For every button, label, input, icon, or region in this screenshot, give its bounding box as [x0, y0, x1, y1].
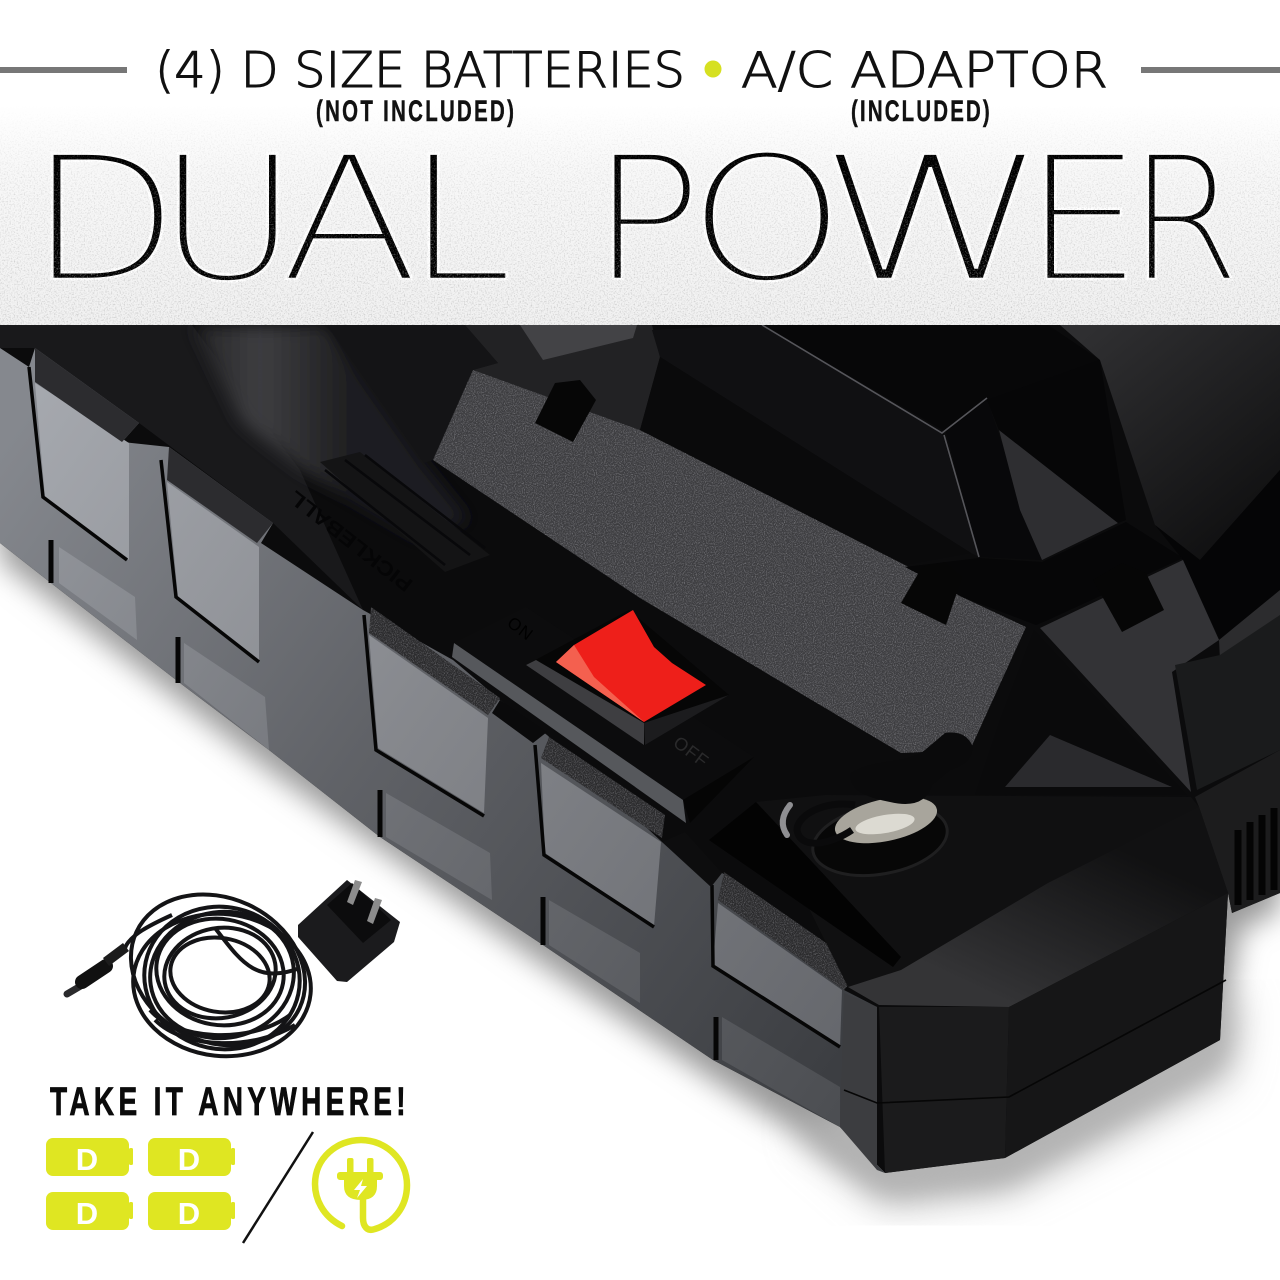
- top left dark plane: [0, 325, 363, 610]
- side wall: [0, 348, 885, 1173]
- adaptor plug face: [327, 883, 391, 943]
- tower top face: [762, 325, 1100, 432]
- corner front face right: [1005, 893, 1228, 1158]
- screw boss 3: [1093, 563, 1164, 632]
- off label: OFF: [670, 732, 713, 772]
- icon: d battery 1: [46, 1138, 133, 1177]
- rear lower black: [1155, 470, 1280, 645]
- title: dual power: [28, 119, 1240, 320]
- tower shiny facet: [999, 430, 1118, 560]
- icon: d battery 4: [148, 1192, 235, 1231]
- screw boss 2: [901, 562, 962, 625]
- tagline: TAKE IT ANYWHERE!: [50, 1080, 406, 1124]
- header: batteries: (4) D SIZE BATTERIES: [155, 42, 685, 99]
- metal nut: [831, 789, 941, 851]
- corner pillar: [840, 993, 877, 1170]
- nut highlight: [854, 810, 916, 838]
- title: dual power: L: [405, 120, 513, 320]
- side window 5: [713, 903, 842, 1047]
- right smooth wedge: [1040, 560, 1219, 792]
- title: dual power: P: [590, 120, 702, 320]
- title: dual power: R: [1128, 120, 1240, 320]
- right slot block: [1195, 750, 1280, 913]
- main black body: [0, 325, 1280, 1173]
- right header rule: [1141, 67, 1280, 73]
- title: dual power: D: [28, 120, 179, 320]
- title: dual power: U: [156, 121, 299, 320]
- icon: d battery 2: D: [178, 1142, 200, 1177]
- switch plate side: [452, 643, 686, 823]
- side window 4: [541, 763, 661, 926]
- corner seam: [844, 980, 1226, 1103]
- jack base ring: [807, 795, 953, 885]
- title: dual power: W: [817, 120, 1049, 320]
- slash divider: [243, 1132, 313, 1243]
- window shadow lines: [29, 367, 840, 1060]
- bezel right lip: [644, 695, 729, 745]
- red rocker highlight: [556, 645, 644, 722]
- tower edge highlight: [762, 325, 987, 557]
- icon: d battery 3: D: [76, 1196, 98, 1231]
- collar: [905, 566, 964, 598]
- power adaptor photo: [67, 867, 400, 1073]
- title: dual power: E: [1023, 119, 1143, 320]
- header: separator dot: [704, 60, 722, 78]
- tower left facet: [652, 330, 658, 351]
- textured strips: [369, 607, 862, 990]
- brand emboss: PICKLEBALL: [285, 486, 417, 595]
- pyramid reflection: [1005, 735, 1172, 787]
- film grain over title band: [0, 105, 1280, 325]
- top panel behind plate: [465, 325, 660, 430]
- adaptor body: [298, 880, 400, 982]
- side window 2: [167, 482, 259, 662]
- sub-label: included: (INCLUDED): [851, 95, 990, 128]
- corner front face left: [879, 1007, 1009, 1173]
- sub-label: not included: (NOT INCLUDED): [316, 95, 514, 128]
- title: dual power: O: [688, 120, 846, 320]
- side window 1: [35, 383, 129, 560]
- power switch: [452, 607, 754, 823]
- rubber loop: [797, 804, 855, 843]
- product photo: base unit: [0, 325, 1280, 1173]
- corner bevel: [848, 807, 1228, 1007]
- screw boss 1: [535, 380, 596, 442]
- strain relief: [106, 947, 126, 962]
- dark pyramid: [975, 630, 1187, 795]
- strip grit: [369, 607, 862, 990]
- brand emboss: [295, 452, 489, 572]
- plate end shadow: [683, 757, 754, 823]
- right upper strip: [1219, 590, 1280, 660]
- prong 1: [347, 880, 362, 905]
- icon: power plug: [315, 1140, 407, 1230]
- black wedge: [709, 802, 901, 967]
- side window 3: [369, 635, 488, 813]
- icon: d battery 2: [148, 1138, 235, 1177]
- prong 2: [367, 898, 382, 924]
- tower front facet: [946, 400, 1042, 560]
- product shadow: [0, 543, 1280, 1225]
- dc power jack: [783, 732, 972, 885]
- red rocker: [556, 610, 706, 722]
- barrel plug tip: [67, 984, 84, 994]
- rubber cap: [851, 732, 972, 804]
- chrome glint: [783, 805, 790, 835]
- corner top face: [756, 795, 1228, 1007]
- switch plate: [454, 607, 754, 800]
- wall caps: [35, 348, 722, 887]
- handle shape: [192, 325, 470, 540]
- deck grit: [433, 370, 1026, 753]
- tower right dark facet: [999, 430, 1118, 523]
- icon: d battery 4: D: [178, 1196, 200, 1231]
- title: dual power: A: [280, 120, 419, 320]
- switch bezel textured lip: [526, 660, 644, 745]
- top plate: [520, 325, 637, 360]
- left header rule: [0, 67, 127, 73]
- icon: d battery 1: D: [76, 1142, 98, 1177]
- tower base strip: [640, 430, 905, 565]
- coiled cable: [106, 867, 330, 1073]
- lower wall panels: [59, 547, 840, 1127]
- right block: [1175, 615, 1280, 790]
- rear housing: [1060, 325, 1280, 560]
- icon: d battery 3: [46, 1192, 133, 1231]
- header: adaptor: A/C ADAPTOR: [741, 42, 1108, 99]
- textured title band: [0, 105, 1280, 325]
- upper middle plane: [327, 325, 498, 463]
- plug body: [82, 966, 106, 982]
- textured deck: [433, 370, 1026, 753]
- on label: ON: [504, 613, 537, 645]
- switch bezel: [526, 610, 729, 745]
